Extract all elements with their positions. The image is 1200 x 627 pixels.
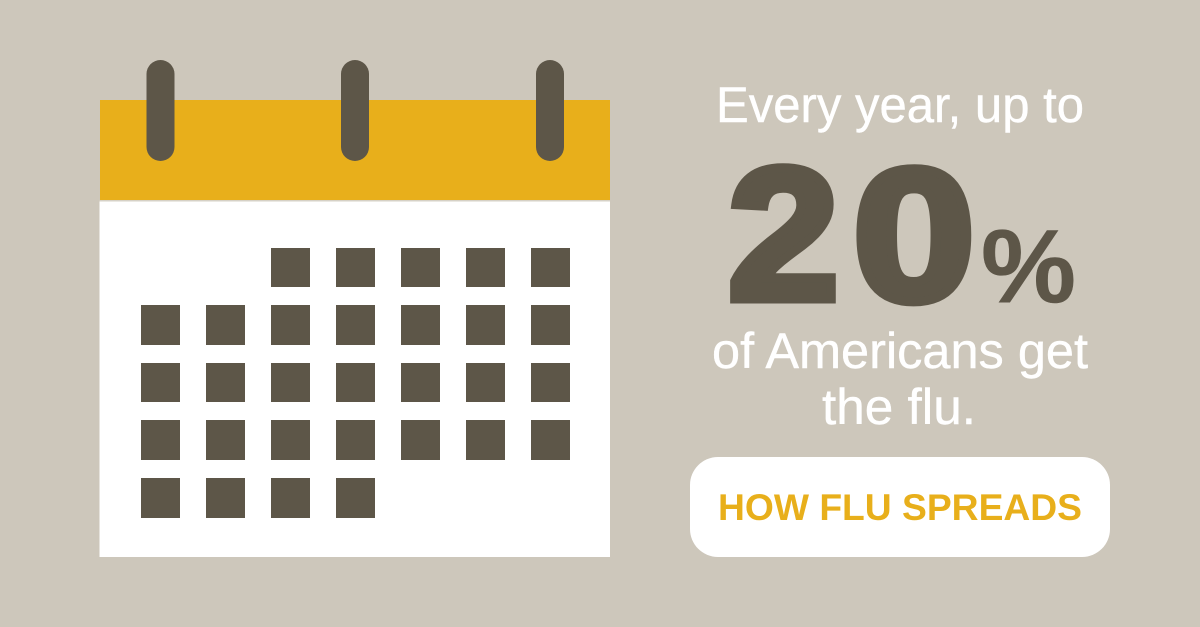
number 20: 2 [728,129,839,339]
statistic: 20 percent [728,129,1076,340]
text: of Americans get the flu: of Americans get [712,323,1088,379]
calendar page [100,200,610,557]
calendar header [100,100,610,200]
percent sign: % [981,209,1076,325]
text: of Americans get the flu: the flu. [822,379,976,435]
day grid [141,248,570,518]
text: of Americans get the flu [712,323,1088,435]
button: how flu spreads: HOW FLU SPREADS [718,487,1082,528]
number 20 [728,129,975,340]
heading: every year: Every year, up to [716,77,1084,133]
binding rings [146,60,564,161]
number 20: 0 [853,130,975,340]
calendar [100,60,610,557]
button: how flu spreads [690,457,1110,557]
